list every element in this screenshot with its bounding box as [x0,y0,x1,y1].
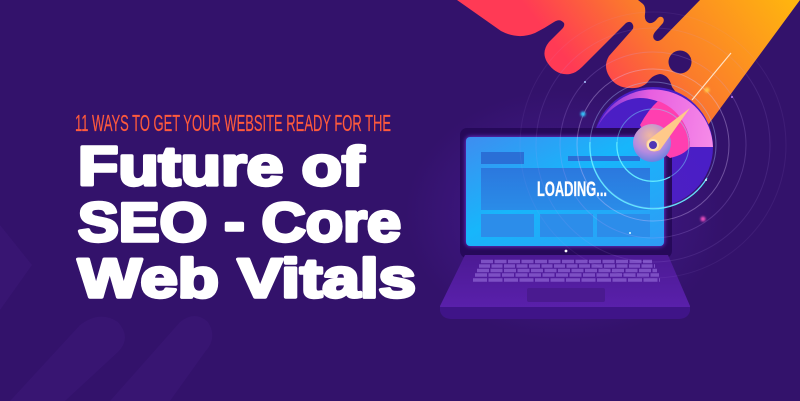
needle pivot [648,140,658,150]
speed line [692,53,731,100]
laptop base lip [440,307,690,319]
flame hole [668,50,692,74]
gauge rings [520,12,786,278]
touchpad [527,288,605,302]
gauge needle [646,108,690,152]
title line 3: Web Vitals [78,247,416,309]
camera dot [565,250,567,252]
laptop [405,90,725,340]
screen glow [466,137,664,246]
keyboard [473,262,660,280]
laptop base [440,255,690,310]
gauge arc [597,89,713,147]
screen [466,137,664,246]
gauge dial background [593,87,713,207]
laptop lid [460,128,672,258]
gauge hub [633,124,671,162]
flame shape [457,0,800,125]
sparkle dots [580,81,733,234]
speed gauge [520,12,786,278]
loading text: LOADING... [537,178,607,201]
title line 1: Future of [78,135,365,197]
title [78,135,416,309]
decorative background shapes [0,225,212,401]
gauge hot sector [640,101,690,158]
subtitle: 11 WAYS TO GET YOUR WEBSITE READY FOR THE [75,110,391,136]
laptop glow [405,90,725,340]
title line 2: SEO - Core [78,191,401,253]
